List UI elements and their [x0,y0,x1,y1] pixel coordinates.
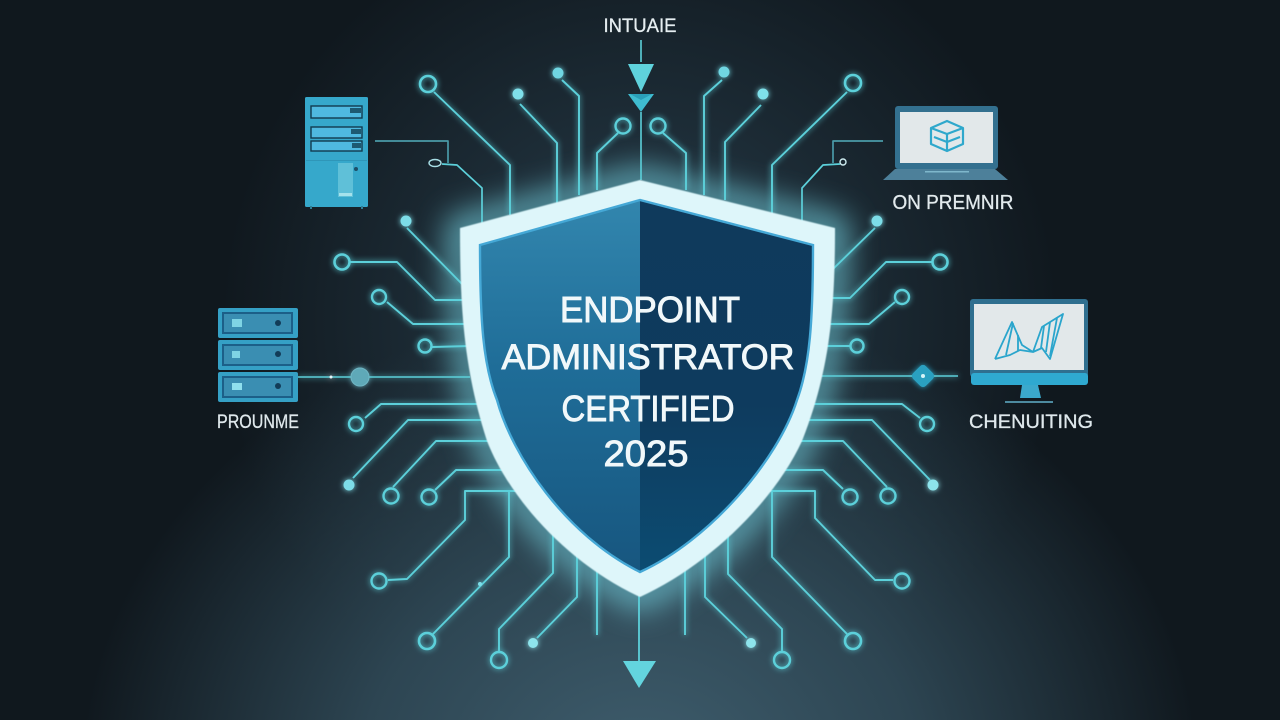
circuit traces: left [298,216,597,668]
top label: INTUAIE [604,16,676,37]
circuit traces: server and laptop connectors [375,141,883,225]
trace: left node 4 [349,404,478,431]
shield title: ENDPOINT [560,289,740,330]
rack unit 2 [218,340,298,370]
icon: tower server [305,97,368,209]
circuit traces: top [420,66,861,215]
infographic canvas [128,0,1151,720]
trace: top right dot 2 [725,88,768,200]
trace: right node 6 [782,470,858,504]
trace: far top right node [772,75,861,215]
trace: top right dot 1 [704,66,730,195]
shield left half [481,201,640,570]
trace: right node 1 [828,254,948,298]
connector: laptop [802,141,883,225]
trace: right hub line [820,363,958,389]
trace: right dot upper [832,216,882,270]
rack unit 1 [218,308,298,338]
right upper label: ON PREMNIR [892,192,1014,214]
trace: left hub line [298,368,470,386]
trace: lower right node 3 [728,535,790,668]
circuit traces: right [685,216,958,668]
shield inner edge [480,200,813,572]
shield outer border [460,180,835,597]
connector: tower server [375,141,482,225]
trace: lower right node 1 [768,491,910,588]
trace: right node 2 [826,290,909,324]
trace: left node 2 [372,290,468,324]
trace: left dot upper [400,216,462,284]
rack unit 3 [218,372,298,402]
trace: lower left node 1 [372,491,516,588]
trace: left node 6 [422,470,506,504]
trace: right dot lower [805,420,938,490]
shield glow [460,180,835,597]
trace: left node 1 [334,254,465,300]
trace: right node 5 [798,441,896,504]
trace: bottom right stub [684,565,686,635]
shield [460,180,835,597]
bottom arrow [623,590,656,688]
trace: lower left node 2 [419,491,509,649]
shield title [502,289,794,474]
trace: left node 3 [418,340,470,352]
trace: top left dot 2 [552,68,579,195]
right lower label: CHENUITING [969,412,1093,433]
top arrow [628,40,654,180]
trace: lower left node 3 [491,530,553,668]
trace: left dot lower [344,420,482,490]
shield title: ADMINISTRATOR [502,338,794,377]
shield title: CERTIFIED [562,388,734,429]
trace: top inner left node [597,118,630,190]
icon: laptop [883,106,1008,180]
trace: bottom left stub [596,565,598,635]
trace: lower right node 2 [772,491,861,649]
icon: monitor [970,299,1088,403]
trace: top left dot 1 [512,88,557,205]
trace: top inner right node [650,118,686,190]
icon: rack server [218,308,298,402]
cube glyph [931,121,963,151]
trace: lower right dot [705,550,756,648]
chart glyph [995,314,1063,359]
trace: lower left dot [528,550,577,648]
trace: far top left node [420,76,510,215]
trace: left node 5 [384,441,490,504]
shield right half [640,201,812,570]
trace: right node 4 [812,404,934,431]
left label: PROUNME [217,412,299,433]
trace: right node 3 [824,340,864,352]
shield title: 2025 [604,433,688,474]
